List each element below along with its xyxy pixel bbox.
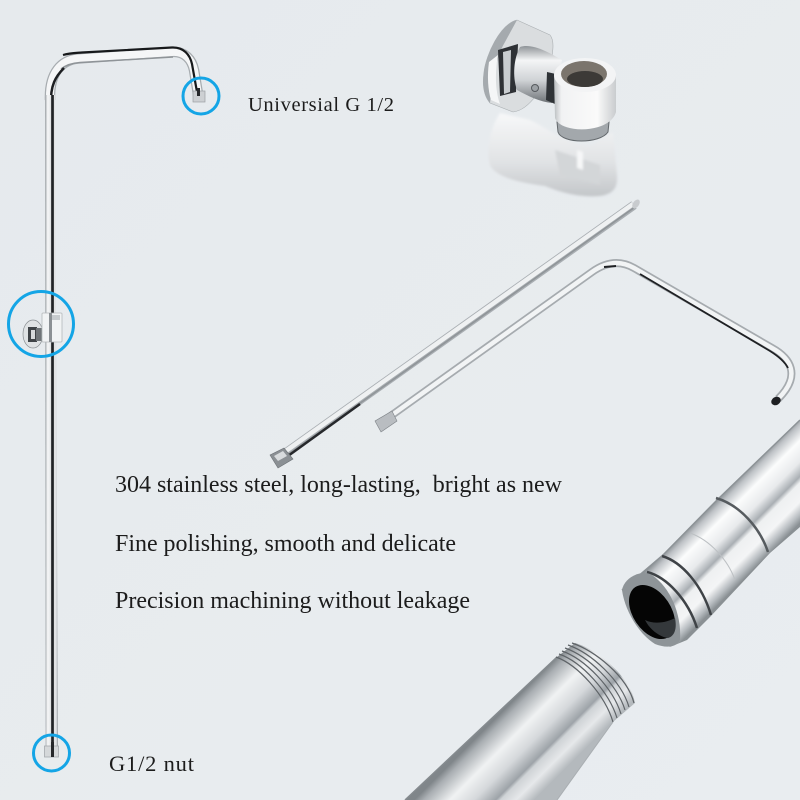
wall mount fitting with reflection — [483, 20, 617, 196]
large tube end with grooves — [619, 420, 800, 647]
fitting reflection — [488, 113, 617, 196]
highlight circle: top outlet — [183, 78, 219, 114]
threaded tube — [405, 643, 635, 800]
highlight circle: wall clamp — [8, 292, 74, 356]
curved arm pipe section — [375, 263, 791, 432]
label: universal thread: Universial G 1/2 — [248, 94, 394, 116]
feature text: polishing: Fine polishing, smooth and delicate — [115, 531, 456, 557]
tube collar grooves — [716, 498, 768, 552]
feature text: stainless steel: 304 stainless steel, long-lasting, bright as new — [115, 472, 563, 498]
tube opening — [622, 573, 680, 647]
feature text: precision: Precision machining without leakage — [115, 588, 470, 614]
fitting back disc — [483, 20, 553, 112]
fitting thread — [557, 122, 609, 141]
wall clamp on pipe — [23, 313, 62, 348]
straight pipe section — [270, 198, 641, 468]
thread rings — [556, 643, 634, 722]
fitting cup — [554, 75, 616, 129]
fitting neck — [498, 44, 518, 96]
label: G1/2 nut: G1/2 nut — [109, 751, 195, 776]
tall shower pipe — [44, 47, 205, 757]
highlight circle: bottom nut — [34, 735, 70, 771]
